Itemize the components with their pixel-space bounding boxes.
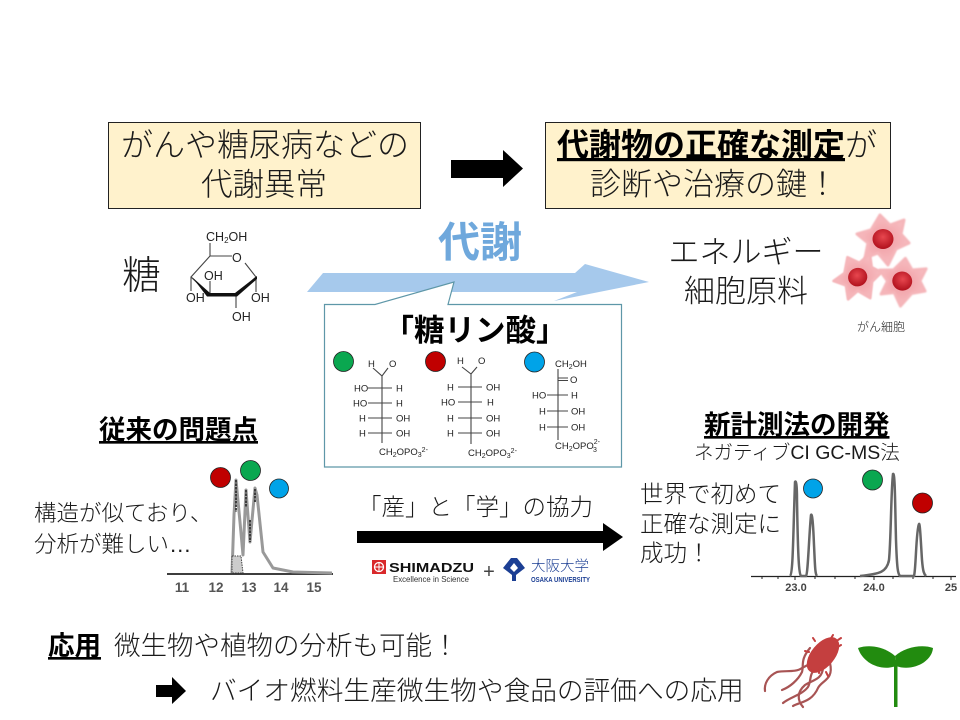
callout: sugar phosphates <box>324 282 622 467</box>
heading: metabolism: 代謝 <box>438 219 522 266</box>
text: industry academia collaboration: 「産」と「学」の協力 <box>358 494 593 520</box>
sugar phosphate structure: green: OH <box>396 428 410 440</box>
icon: cancer cells <box>828 215 932 334</box>
sugar phosphate structure: red: 2- <box>511 448 518 455</box>
icon: glucose structure: OH <box>232 310 251 324</box>
key box: accurate measurement <box>546 122 890 208</box>
arrow: metabolism flow <box>307 264 649 301</box>
sugar phosphate structure: green: OPO <box>397 447 418 458</box>
icon: cancer cells: がん細胞 <box>857 320 905 334</box>
key box: accurate measurement: 代謝物の正確な測定が <box>557 127 877 163</box>
sugar phosphate structure: blue: HO <box>532 390 546 402</box>
text: first accurate measurement: 成功！ <box>640 540 710 566</box>
sugar phosphate structure: red: OPO <box>486 448 507 459</box>
sugar phosphate structure: blue: 2- <box>594 439 601 446</box>
chart: new method chromatogram: 23.0 <box>785 582 807 594</box>
text: applications: 応用 <box>48 631 101 661</box>
sugar phosphate structure: blue: 3 <box>593 447 597 454</box>
sugar phosphate structure: red <box>426 352 518 460</box>
problem box: metabolic abnormality <box>108 122 420 208</box>
icon: glucose structure: O <box>232 251 242 265</box>
text: biofuel application: バイオ燃料生産微生物や食品の評価への応用 <box>210 676 744 706</box>
logos: Shimadzu and Osaka University: OSAKA UNIVERSITY <box>531 577 590 584</box>
sugar phosphate structure: blue: H <box>539 406 546 418</box>
icon: glucose structure: OH <box>204 269 223 283</box>
logos: Shimadzu and Osaka University: Excellence in Science <box>393 574 469 584</box>
logos: Shimadzu and Osaka University: + <box>483 561 495 583</box>
arrow: small black arrow <box>156 677 186 704</box>
sugar phosphate structure: blue: OPO <box>573 441 594 452</box>
arrow: collaboration <box>357 523 623 551</box>
icon: glucose structure: OH <box>186 291 205 305</box>
sugar phosphate structure: red: 2 <box>482 453 486 460</box>
callout: sugar phosphates: 「糖リン酸」 <box>384 314 566 348</box>
sugar phosphate structure: green: HO <box>354 384 368 394</box>
sugar phosphate structure: blue: O <box>570 375 577 386</box>
key box: accurate measurement: 診断や治療の鍵！ <box>590 167 838 202</box>
icon: glucose structure: OH <box>251 291 270 305</box>
problem box: metabolic abnormality: がんや糖尿病などの <box>121 127 409 163</box>
sugar phosphate structure: green: 2 <box>393 452 397 459</box>
sugar phosphate structure: green: OH <box>396 414 410 424</box>
sugar phosphate structure: blue: H <box>539 422 546 434</box>
icon: glucose structure: CH <box>206 230 224 244</box>
text: first accurate measurement: 正確な測定に <box>640 511 781 537</box>
chart: conventional chromatogram: 14 <box>273 580 289 595</box>
sugar phosphate structure: blue: H <box>571 390 578 402</box>
sugar phosphate structure: green: H <box>359 428 366 440</box>
heading: conventional problems: 従来の問題点 <box>99 415 258 445</box>
sugar phosphate structure: green: H <box>359 414 366 424</box>
sugar phosphate structure: blue: 2 <box>569 446 573 453</box>
chart: conventional chromatogram: 11 <box>175 580 190 595</box>
sugar phosphate structure: red: O <box>478 356 485 367</box>
sugar phosphate structure: blue: OH <box>571 406 585 418</box>
sugar phosphate structure: green: H <box>396 384 403 394</box>
arrow: black right arrow <box>451 150 523 187</box>
sugar phosphate structure: red: CH <box>468 448 482 459</box>
text: difficult to analyze: 分析が難しい… <box>34 532 192 557</box>
icon: seedling <box>858 646 933 707</box>
sugar phosphate structure: green: O <box>389 359 396 370</box>
logos: Shimadzu and Osaka University: 大阪大学 <box>531 558 589 575</box>
chart: conventional chromatogram: 12 <box>208 580 224 595</box>
sugar phosphate structure: green: CH <box>379 447 393 458</box>
text: first accurate measurement: 世界で初めて <box>640 481 781 507</box>
sugar phosphate structure: green: H <box>396 398 403 410</box>
chart: new method chromatogram <box>751 470 957 594</box>
sugar phosphate structure: green: 3 <box>418 452 422 459</box>
label: energy and cell materials: 細胞原料 <box>684 274 808 309</box>
sugar phosphate structure: blue: CH <box>555 359 569 370</box>
sugar phosphate structure: green: HO <box>353 398 367 410</box>
label: energy and cell materials <box>668 235 824 309</box>
text: negative CI GC-MS method: ネガティブCI GC-MS法 <box>694 442 900 464</box>
logos: Shimadzu and Osaka University <box>372 558 590 584</box>
sugar phosphate structure: red: HO <box>441 398 455 408</box>
text: first accurate measurement <box>640 481 781 566</box>
chart: conventional chromatogram: 15 <box>306 580 322 595</box>
sugar phosphate structure: blue: 2 <box>569 364 573 371</box>
chart: new method chromatogram: 25 <box>945 582 957 594</box>
sugar phosphate structure: red: 3 <box>507 453 511 460</box>
chart: new method chromatogram: 24.0 <box>863 582 885 594</box>
icon: glucose structure <box>186 230 270 324</box>
chart: conventional chromatogram: 13 <box>241 580 257 595</box>
sugar phosphate structure: red: OH <box>486 414 500 424</box>
chart: conventional chromatogram <box>167 460 333 595</box>
sugar phosphate structure: blue: OH <box>571 422 585 434</box>
sugar phosphate structure: red: OH <box>486 382 500 394</box>
text: applications: 微生物や植物の分析も可能！ <box>114 631 458 661</box>
label: energy and cell materials: エネルギー <box>668 235 824 270</box>
icon: microbe <box>765 633 844 707</box>
icon: glucose structure: OH <box>229 230 247 244</box>
sugar phosphate structure: red: H <box>447 382 454 394</box>
sugar phosphate structure: blue <box>524 352 601 454</box>
text: difficult to analyze <box>34 501 212 557</box>
sugar phosphate structure: green <box>334 352 429 459</box>
problem box: metabolic abnormality: 代謝異常 <box>201 166 327 202</box>
sugar phosphate structure: red: H <box>447 428 454 440</box>
sugar phosphate structure: blue: CH <box>555 441 569 452</box>
sugar phosphate structure: blue: OH <box>573 359 587 370</box>
icon: glucose structure: 2 <box>224 236 229 245</box>
sugar phosphate structure: green: H <box>368 359 375 370</box>
sugar phosphate structure: red: OH <box>486 428 500 440</box>
label: sugar: 糖 <box>122 255 161 298</box>
heading: new measurement method: 新計測法の開発 <box>704 410 890 440</box>
sugar phosphate structure: green: 2- <box>422 447 429 454</box>
text: difficult to analyze: 構造が似ており、 <box>34 501 212 526</box>
sugar phosphate structure: red: H <box>447 414 454 424</box>
logos: Shimadzu and Osaka University: SHIMADZU <box>389 560 474 575</box>
sugar phosphate structure: red: H <box>457 356 464 367</box>
sugar phosphate structure: red: H <box>487 398 494 408</box>
